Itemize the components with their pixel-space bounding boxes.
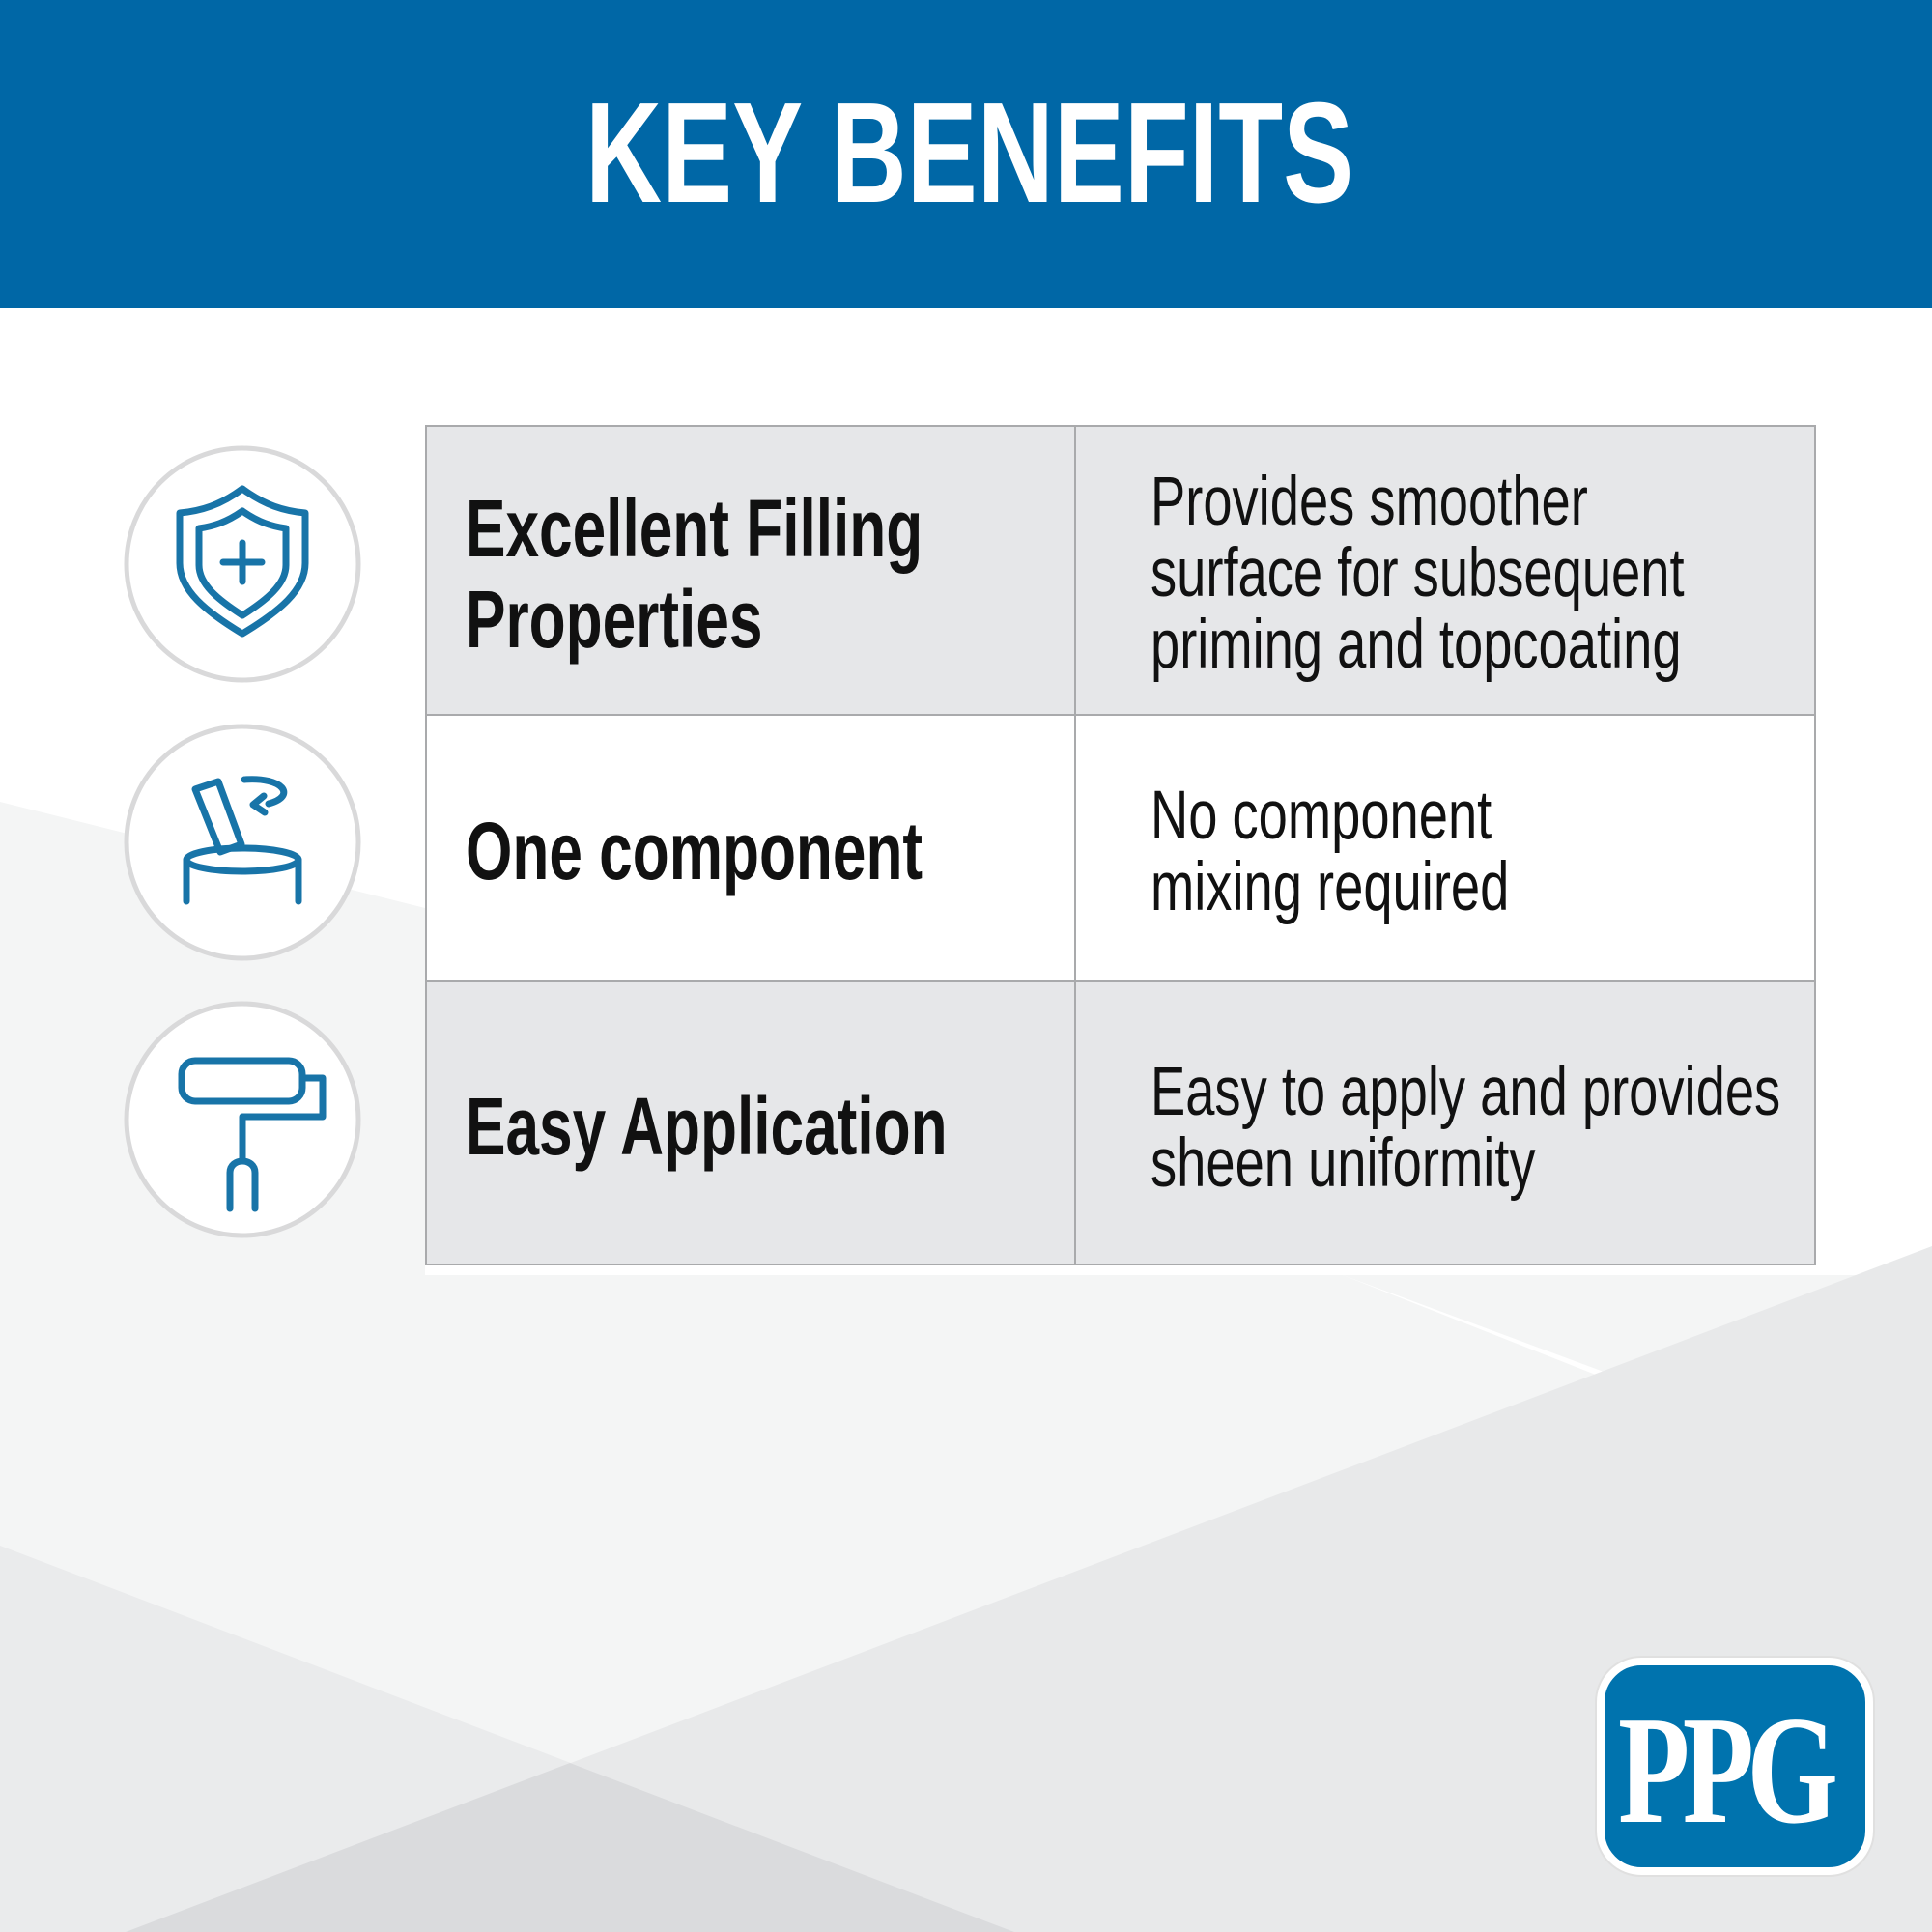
logo: PPG	[1597, 1658, 1873, 1875]
text: excellent filling: Properties	[466, 574, 762, 665]
row 2	[427, 716, 1814, 982]
text: excellent filling	[466, 483, 923, 665]
row 3	[427, 982, 1814, 1264]
text: easy to apply: sheen uniformity	[1151, 1125, 1536, 1202]
text: no component mixing: No component	[1151, 778, 1492, 854]
text: provides smoother: priming and topcoating	[1151, 607, 1682, 683]
text: excellent filling: Excellent Filling	[466, 483, 923, 574]
row 1	[427, 427, 1814, 716]
text: easy to apply: Easy to apply and provides	[1151, 1054, 1780, 1130]
text: easy application: Easy Application	[466, 1081, 948, 1172]
text: no component mixing: mixing required	[1151, 849, 1509, 925]
text: easy to apply	[1151, 1054, 1780, 1202]
header banner	[0, 0, 1932, 308]
text: no component mixing	[1151, 778, 1509, 925]
benefits table	[425, 425, 1816, 1265]
icon: paint roller	[124, 1001, 361, 1238]
icon: shield	[124, 446, 361, 682]
text: provides smoother: Provides smoother	[1151, 464, 1588, 540]
text: provides smoother	[1151, 464, 1685, 683]
title: KEY BENEFITS	[585, 73, 1353, 233]
text: provides smoother: surface for subsequent	[1151, 535, 1685, 611]
logo: PPG: PPG	[1618, 1684, 1831, 1856]
icon: mixing can	[124, 724, 361, 960]
text: one component: One component	[466, 806, 923, 896]
